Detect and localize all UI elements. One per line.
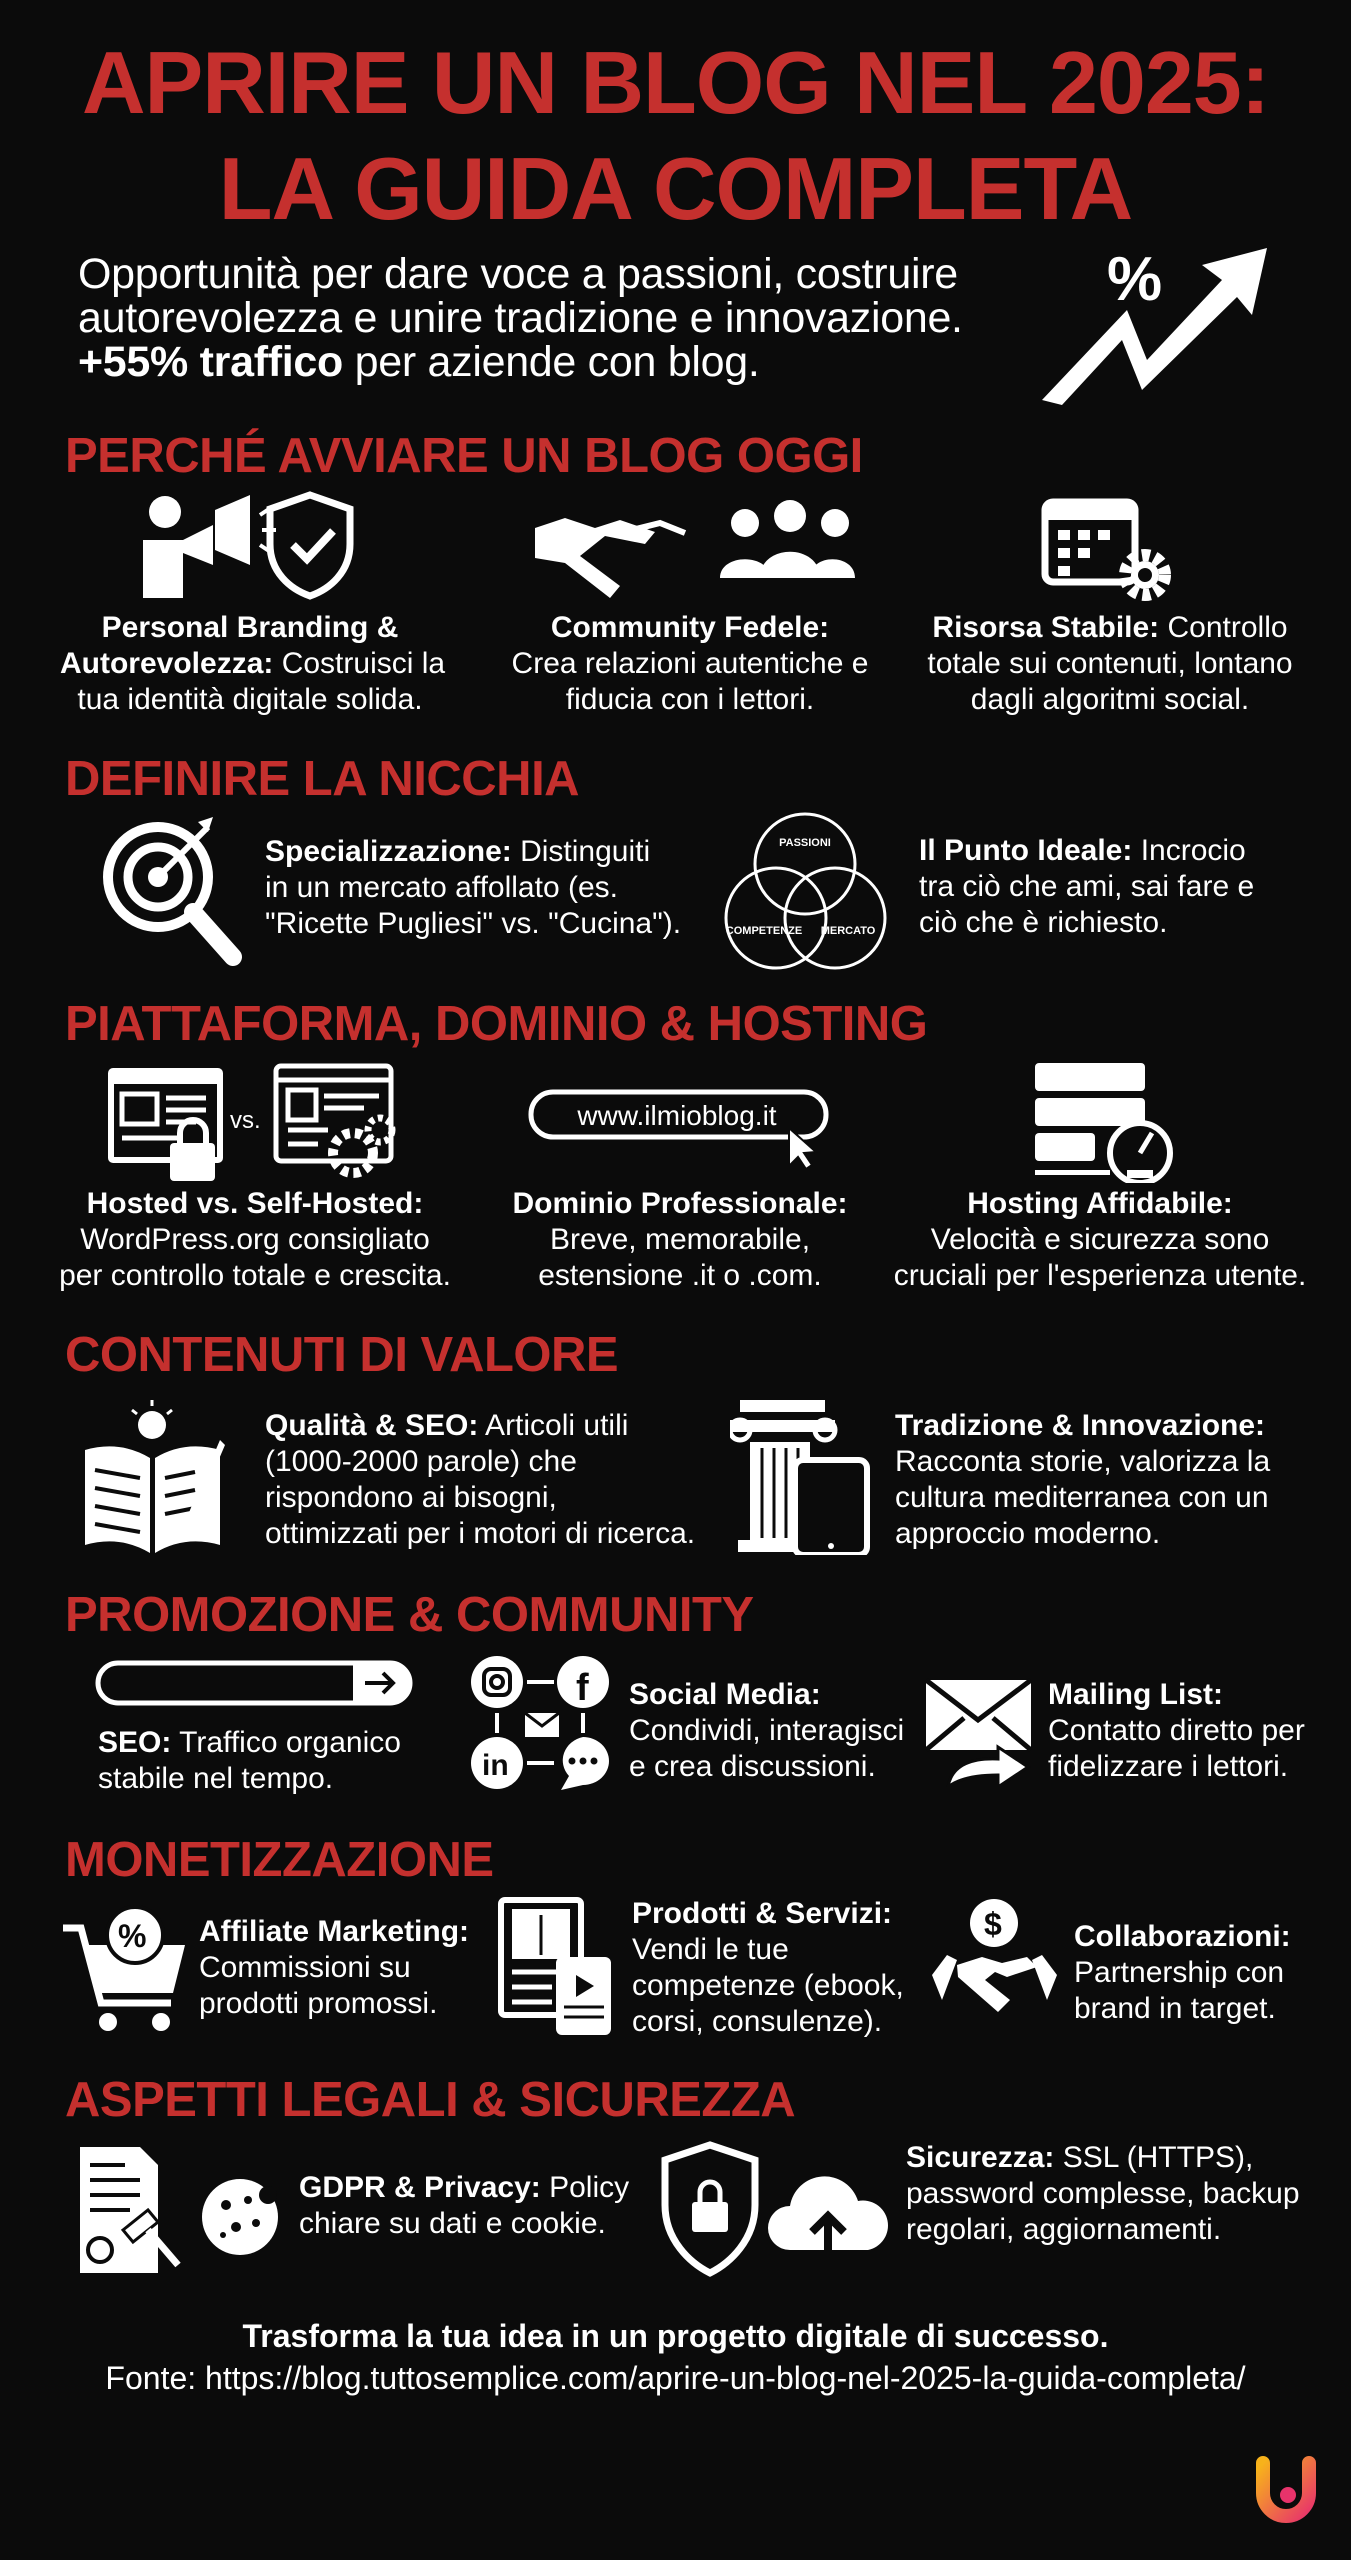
text: hosting bbox=[894, 1187, 1306, 1292]
icon: growth arrow: % bbox=[1107, 245, 1162, 314]
text: sicurezza bbox=[906, 2140, 1300, 2248]
text: seo: SEO: Traffico organico bbox=[98, 1726, 401, 1759]
icon: url bar bbox=[528, 1090, 828, 1168]
text: dominio: estensione .it o .com. bbox=[538, 1259, 822, 1292]
text: hosting: Velocità e sicurezza sono bbox=[931, 1223, 1269, 1256]
footer text bbox=[0, 2315, 1351, 2399]
text: risorsa stabile bbox=[927, 611, 1293, 716]
text: hosted: Hosted vs. Self-Hosted: bbox=[87, 1187, 423, 1220]
text: punto ideale bbox=[919, 834, 1254, 939]
icon: book tablet bbox=[498, 1897, 613, 2037]
text: affiliate: Commissioni su bbox=[199, 1951, 411, 1984]
panel: hosted bbox=[59, 1064, 451, 1292]
title: APRIRE UN BLOG NEL 2025: bbox=[82, 33, 1269, 132]
text: dominio: Breve, memorabile, bbox=[550, 1223, 810, 1256]
panel: hosting bbox=[894, 1063, 1306, 1292]
text: seo bbox=[98, 1726, 401, 1795]
text: hosting: cruciali per l'esperienza utente. bbox=[894, 1259, 1306, 1292]
icon: growth arrow bbox=[1042, 245, 1267, 405]
panel: risorsa stabile bbox=[927, 498, 1293, 716]
text: personal branding: Personal Branding & bbox=[102, 611, 398, 644]
text: collaborazioni: Partnership con bbox=[1074, 1956, 1284, 1989]
text: prodotti: corsi, consulenze). bbox=[632, 2005, 882, 2038]
footer text: Trasforma la tua idea in un progetto digitale di successo. bbox=[243, 2318, 1108, 2354]
icon: megaphone shield bbox=[143, 491, 354, 600]
title bbox=[82, 33, 1269, 238]
icon: handshake dollar bbox=[932, 1895, 1057, 2030]
icon: browsers vs: vs. bbox=[230, 1107, 261, 1134]
icon: social network: in bbox=[482, 1749, 509, 1782]
text: hosting: Hosting Affidabile: bbox=[967, 1187, 1233, 1220]
text: sicurezza: regolari, aggiornamenti. bbox=[906, 2213, 1221, 2246]
panel: community bbox=[512, 500, 868, 716]
text: tradizione: Tradizione & Innovazione: bbox=[895, 1409, 1265, 1442]
text: collaborazioni bbox=[1074, 1919, 1291, 2027]
text: dominio: Dominio Professionale: bbox=[512, 1187, 848, 1220]
title: LA GUIDA COMPLETA bbox=[219, 139, 1132, 238]
icon: handshake people bbox=[535, 500, 855, 598]
heading: nicchia: DEFINIRE LA NICCHIA bbox=[65, 752, 579, 806]
text: prodotti: competenze (ebook, bbox=[632, 1969, 904, 2002]
text: hosted: WordPress.org consigliato bbox=[80, 1223, 430, 1256]
panel: mailing bbox=[926, 1678, 1305, 1784]
text: prodotti bbox=[632, 1896, 904, 2040]
panel: collaborazioni bbox=[932, 1895, 1332, 2045]
text: sicurezza: password complesse, backup bbox=[906, 2177, 1300, 2210]
icon: envelope arrow bbox=[923, 1677, 1038, 1787]
text: qualità: rispondono ai bisogni, bbox=[265, 1481, 557, 1514]
icon: venn diagram bbox=[724, 812, 886, 970]
intro text bbox=[78, 250, 963, 386]
panel: prodotti bbox=[498, 1892, 918, 2042]
panel: qualità seo bbox=[85, 1400, 695, 1553]
heading: monetizzazione: MONETIZZAZIONE bbox=[65, 1833, 494, 1887]
text: risorsa stabile: Risorsa Stabile: Controllo bbox=[932, 611, 1288, 644]
text: seo: stabile nel tempo. bbox=[98, 1762, 333, 1795]
heading: legali: ASPETTI LEGALI & SICUREZZA bbox=[65, 2073, 795, 2127]
text: collaborazioni: brand in target. bbox=[1074, 1992, 1276, 2025]
text: affiliate: Affiliate Marketing: bbox=[199, 1915, 469, 1948]
heading: piattaforma: PIATTAFORMA, DOMINIO & HOSTING bbox=[65, 997, 927, 1051]
text: hosted: per controllo totale e crescita. bbox=[59, 1259, 451, 1292]
icon: calendar gear bbox=[1042, 498, 1171, 601]
text: punto ideale: tra ciò che ami, sai fare e bbox=[919, 870, 1254, 903]
panel: personal branding bbox=[60, 491, 446, 716]
text: qualità: ottimizzati per i motori di ricerca. bbox=[265, 1517, 695, 1550]
logo bbox=[1255, 2455, 1317, 2525]
text: specializzazione: "Ricette Pugliesi" vs. "Cucina"). bbox=[265, 907, 681, 940]
icon: column tablet bbox=[730, 1400, 870, 1555]
icon: target magnifier bbox=[103, 817, 242, 966]
text: affiliate bbox=[199, 1914, 469, 2022]
icon: search bar bbox=[96, 1660, 412, 1706]
panel: seo bbox=[96, 1660, 412, 1795]
text: punto ideale: Il Punto Ideale: Incrocio bbox=[919, 834, 1246, 867]
icon: venn diagram: PASSIONI bbox=[779, 837, 831, 849]
text: dominio bbox=[512, 1187, 848, 1292]
text: gdpr: chiare su dati e cookie. bbox=[299, 2207, 606, 2240]
text: social bbox=[629, 1678, 904, 1783]
text: tradizione: Racconta storie, valorizza la bbox=[895, 1445, 1270, 1478]
icon: cart percent bbox=[63, 1900, 188, 2035]
icon: book bulb bbox=[85, 1400, 225, 1553]
text: prodotti: Prodotti & Servizi: bbox=[632, 1897, 892, 1930]
panel: tradizione bbox=[730, 1400, 1270, 1555]
icon: social network bbox=[471, 1656, 609, 1790]
text: specializzazione: Specializzazione: Distinguiti bbox=[265, 835, 650, 868]
text: specializzazione bbox=[265, 835, 681, 940]
icon: venn diagram: COMPETENZE bbox=[726, 925, 802, 937]
text: social: Social Media: bbox=[629, 1678, 821, 1711]
text: personal branding: tua identità digitale solida. bbox=[77, 683, 423, 716]
icon: handshake dollar: $ bbox=[984, 1906, 1002, 1942]
icon: document gavel cookie bbox=[78, 2145, 283, 2275]
panel: gdpr bbox=[78, 2145, 638, 2280]
panel: punto ideale bbox=[724, 812, 1254, 970]
icon: social network: f bbox=[576, 1667, 589, 1709]
text: gdpr: GDPR & Privacy: Policy bbox=[299, 2171, 629, 2204]
text: community bbox=[512, 611, 868, 716]
text: sicurezza: Sicurezza: SSL (HTTPS), bbox=[906, 2141, 1253, 2174]
text: tradizione: cultura mediterranea con un bbox=[895, 1481, 1269, 1514]
intro text: +55% traffico per aziende con blog. bbox=[78, 338, 760, 386]
text: tradizione bbox=[895, 1409, 1270, 1550]
text: social: e crea discussioni. bbox=[629, 1750, 876, 1783]
text: qualità: (1000-2000 parole) che bbox=[265, 1445, 577, 1478]
text: gdpr bbox=[299, 2170, 629, 2242]
heading: promozione: PROMOZIONE & COMMUNITY bbox=[65, 1588, 754, 1642]
text: qualità bbox=[265, 1409, 695, 1550]
footer text: Fonte: https://blog.tuttosemplice.com/aprire-un-blog-nel-2025-la-guida-completa/ bbox=[105, 2360, 1246, 2396]
panel: sicurezza bbox=[660, 2140, 1330, 2285]
text: punto ideale: ciò che è richiesto. bbox=[919, 906, 1167, 939]
heading: perché: PERCHÉ AVVIARE UN BLOG OGGI bbox=[65, 429, 863, 483]
text: mailing: Contatto diretto per bbox=[1048, 1714, 1305, 1747]
text: qualità: Qualità & SEO: Articoli utili bbox=[265, 1409, 628, 1442]
text: tradizione: approccio moderno. bbox=[895, 1517, 1160, 1550]
text: risorsa stabile: totale sui contenuti, lontano bbox=[927, 647, 1293, 680]
text: social: Condividi, interagisci bbox=[629, 1714, 904, 1747]
panel: social bbox=[471, 1656, 904, 1790]
text: community: fiducia con i lettori. bbox=[566, 683, 814, 716]
icon: browsers vs bbox=[108, 1064, 396, 1181]
heading: contenuti: CONTENUTI DI VALORE bbox=[65, 1328, 618, 1382]
text: specializzazione: in un mercato affollato (es. bbox=[265, 871, 618, 904]
text: risorsa stabile: dagli algoritmi social. bbox=[971, 683, 1249, 716]
text: mailing bbox=[1048, 1677, 1305, 1785]
text: hosted bbox=[59, 1187, 451, 1292]
text: personal branding bbox=[60, 611, 446, 716]
icon: url bar: www.ilmioblog.it bbox=[576, 1100, 777, 1131]
panel: dominio bbox=[512, 1090, 848, 1292]
text: prodotti: Vendi le tue bbox=[632, 1933, 789, 1966]
text: personal branding: Autorevolezza: Costruisci la bbox=[60, 647, 445, 680]
intro text: Opportunità per dare voce a passioni, costruire bbox=[78, 250, 958, 298]
text: community: Crea relazioni autentiche e bbox=[512, 647, 868, 680]
icon: server gauge bbox=[1035, 1063, 1173, 1183]
icon: venn diagram: MERCATO bbox=[821, 925, 876, 937]
text: collaborazioni: Collaborazioni: bbox=[1074, 1920, 1291, 1953]
icon: shield cloud bbox=[660, 2140, 895, 2280]
intro text: autorevolezza e unire tradizione e innovazione. bbox=[78, 294, 963, 342]
panel: affiliate bbox=[63, 1900, 483, 2040]
text: community: Community Fedele: bbox=[551, 611, 829, 644]
icon: cart percent: % bbox=[118, 1918, 146, 1954]
text: mailing: Mailing List: bbox=[1048, 1678, 1223, 1711]
text: mailing: fidelizzare i lettori. bbox=[1048, 1750, 1288, 1783]
panel: specializzazione bbox=[103, 817, 681, 966]
text: affiliate: prodotti promossi. bbox=[199, 1987, 437, 2020]
